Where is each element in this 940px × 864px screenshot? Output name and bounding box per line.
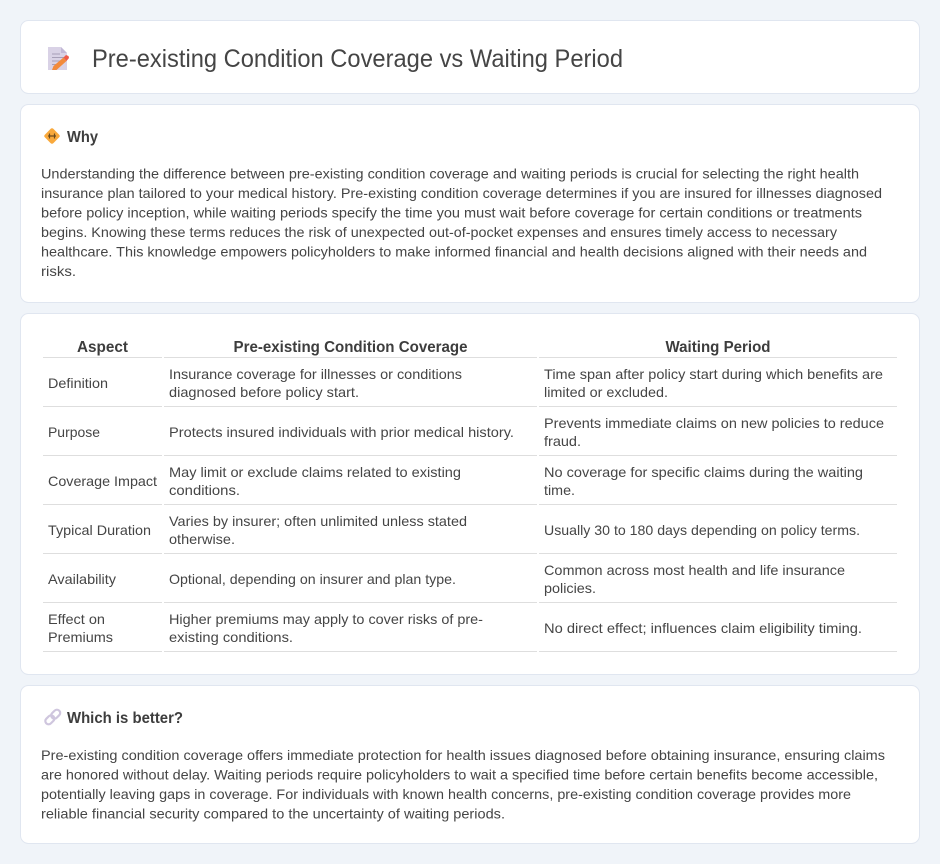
row: definition: limited or excluded.	[544, 384, 668, 400]
text block: which is better: reliable financial security compared to the uncertainty of waiting periods.	[41, 806, 505, 822]
row: availability: Common across most health and life insurance	[544, 562, 845, 578]
row: definition	[48, 366, 883, 400]
icon: document with pencil	[48, 47, 69, 70]
row: purpose: fraud.	[544, 433, 581, 449]
row: availability: Optional, depending on insurer and plan type.	[169, 571, 456, 587]
text block: which is better: Pre-existing condition coverage offers immediate protection for health issues diagnosed before obtaining insurance, ensuring claims	[41, 747, 885, 763]
text block: why: begins. Knowing these terms reduces the risk of unexpected out-of-pocket expenses and ensures timely access to necessary	[41, 224, 837, 240]
row: purpose: Prevents immediate claims on new policies to reduce	[544, 415, 884, 431]
panel: comparison table	[20, 314, 920, 674]
row: effect on premiums: Effect on	[48, 611, 105, 627]
row: typical duration: Usually 30 to 180 days depending on policy terms.	[544, 522, 860, 538]
row: purpose: Purpose	[48, 424, 100, 440]
title: Pre-existing Condition Coverage vs Waiting Period	[92, 45, 623, 73]
row: effect on premiums: Higher premiums may apply to cover risks of pre-	[169, 611, 483, 627]
row: effect on premiums: existing conditions.	[169, 629, 293, 645]
row: definition: Time span after policy start during which benefits are	[544, 366, 883, 382]
text block: which is better	[41, 747, 885, 822]
table header: Waiting Period	[666, 339, 770, 356]
table header: Aspect	[77, 339, 129, 356]
row: definition: diagnosed before policy start.	[169, 384, 359, 400]
text block: which is better: are honored without delay. Waiting periods require policyholders to wait a specified time before certain benefits become accessible,	[41, 766, 878, 782]
text block: why: Understanding the difference between pre-existing condition coverage and waiting periods is crucial for selecting the right health	[41, 166, 859, 182]
row: coverage impact: time.	[544, 482, 575, 498]
row: coverage impact: No coverage for specific claims during the waiting	[544, 464, 863, 480]
row: availability: policies.	[544, 580, 596, 596]
row: typical duration: otherwise.	[169, 531, 235, 547]
row: effect on premiums: No direct effect; influences claim eligibility timing.	[544, 620, 862, 636]
text block: why: healthcare. This knowledge empowers policyholders to make informed financial and health decisions aligned with their needs and	[41, 244, 867, 260]
row: definition: Insurance coverage for illnesses or conditions	[169, 366, 462, 382]
table header	[77, 339, 770, 356]
row: coverage impact: Coverage Impact	[48, 473, 157, 489]
row: coverage impact	[48, 464, 863, 498]
heading: which is better: Which is better?	[67, 710, 183, 727]
panel: which is better	[20, 686, 920, 844]
panel: why	[20, 104, 920, 302]
row: typical duration	[48, 513, 860, 547]
row: purpose	[48, 415, 884, 449]
text block: why: before policy inception, while waiting periods specify the time you must wait before coverage for certain conditions or treatments	[41, 204, 862, 220]
row: availability: Availability	[48, 571, 116, 587]
icon: warning diamond	[44, 128, 60, 144]
row: effect on premiums	[48, 611, 862, 645]
row: definition: Definition	[48, 375, 108, 391]
text block: why: risks.	[41, 263, 76, 279]
row: typical duration: Varies by insurer; often unlimited unless stated	[169, 513, 467, 529]
heading: why: Why	[67, 129, 98, 146]
row: availability	[48, 562, 845, 596]
row: coverage impact: conditions.	[169, 482, 240, 498]
text block: why	[41, 166, 882, 279]
icon: chain link	[44, 708, 62, 726]
row: purpose: Protects insured individuals with prior medical history.	[169, 424, 514, 440]
text block: which is better: potentially leaving gaps in coverage. For individuals with known health concerns, pre-existing condition coverage provides more	[41, 786, 851, 802]
row: coverage impact: May limit or exclude claims related to existing	[169, 464, 461, 480]
table header: Pre-existing Condition Coverage	[234, 339, 468, 356]
row: typical duration: Typical Duration	[48, 522, 151, 538]
text block: why: insurance plan tailored to your medical history. Pre-existing condition coverage determines if you are insured for illnesses diagnosed	[41, 185, 882, 201]
panel: title card	[20, 20, 920, 94]
row: effect on premiums: Premiums	[48, 629, 113, 645]
